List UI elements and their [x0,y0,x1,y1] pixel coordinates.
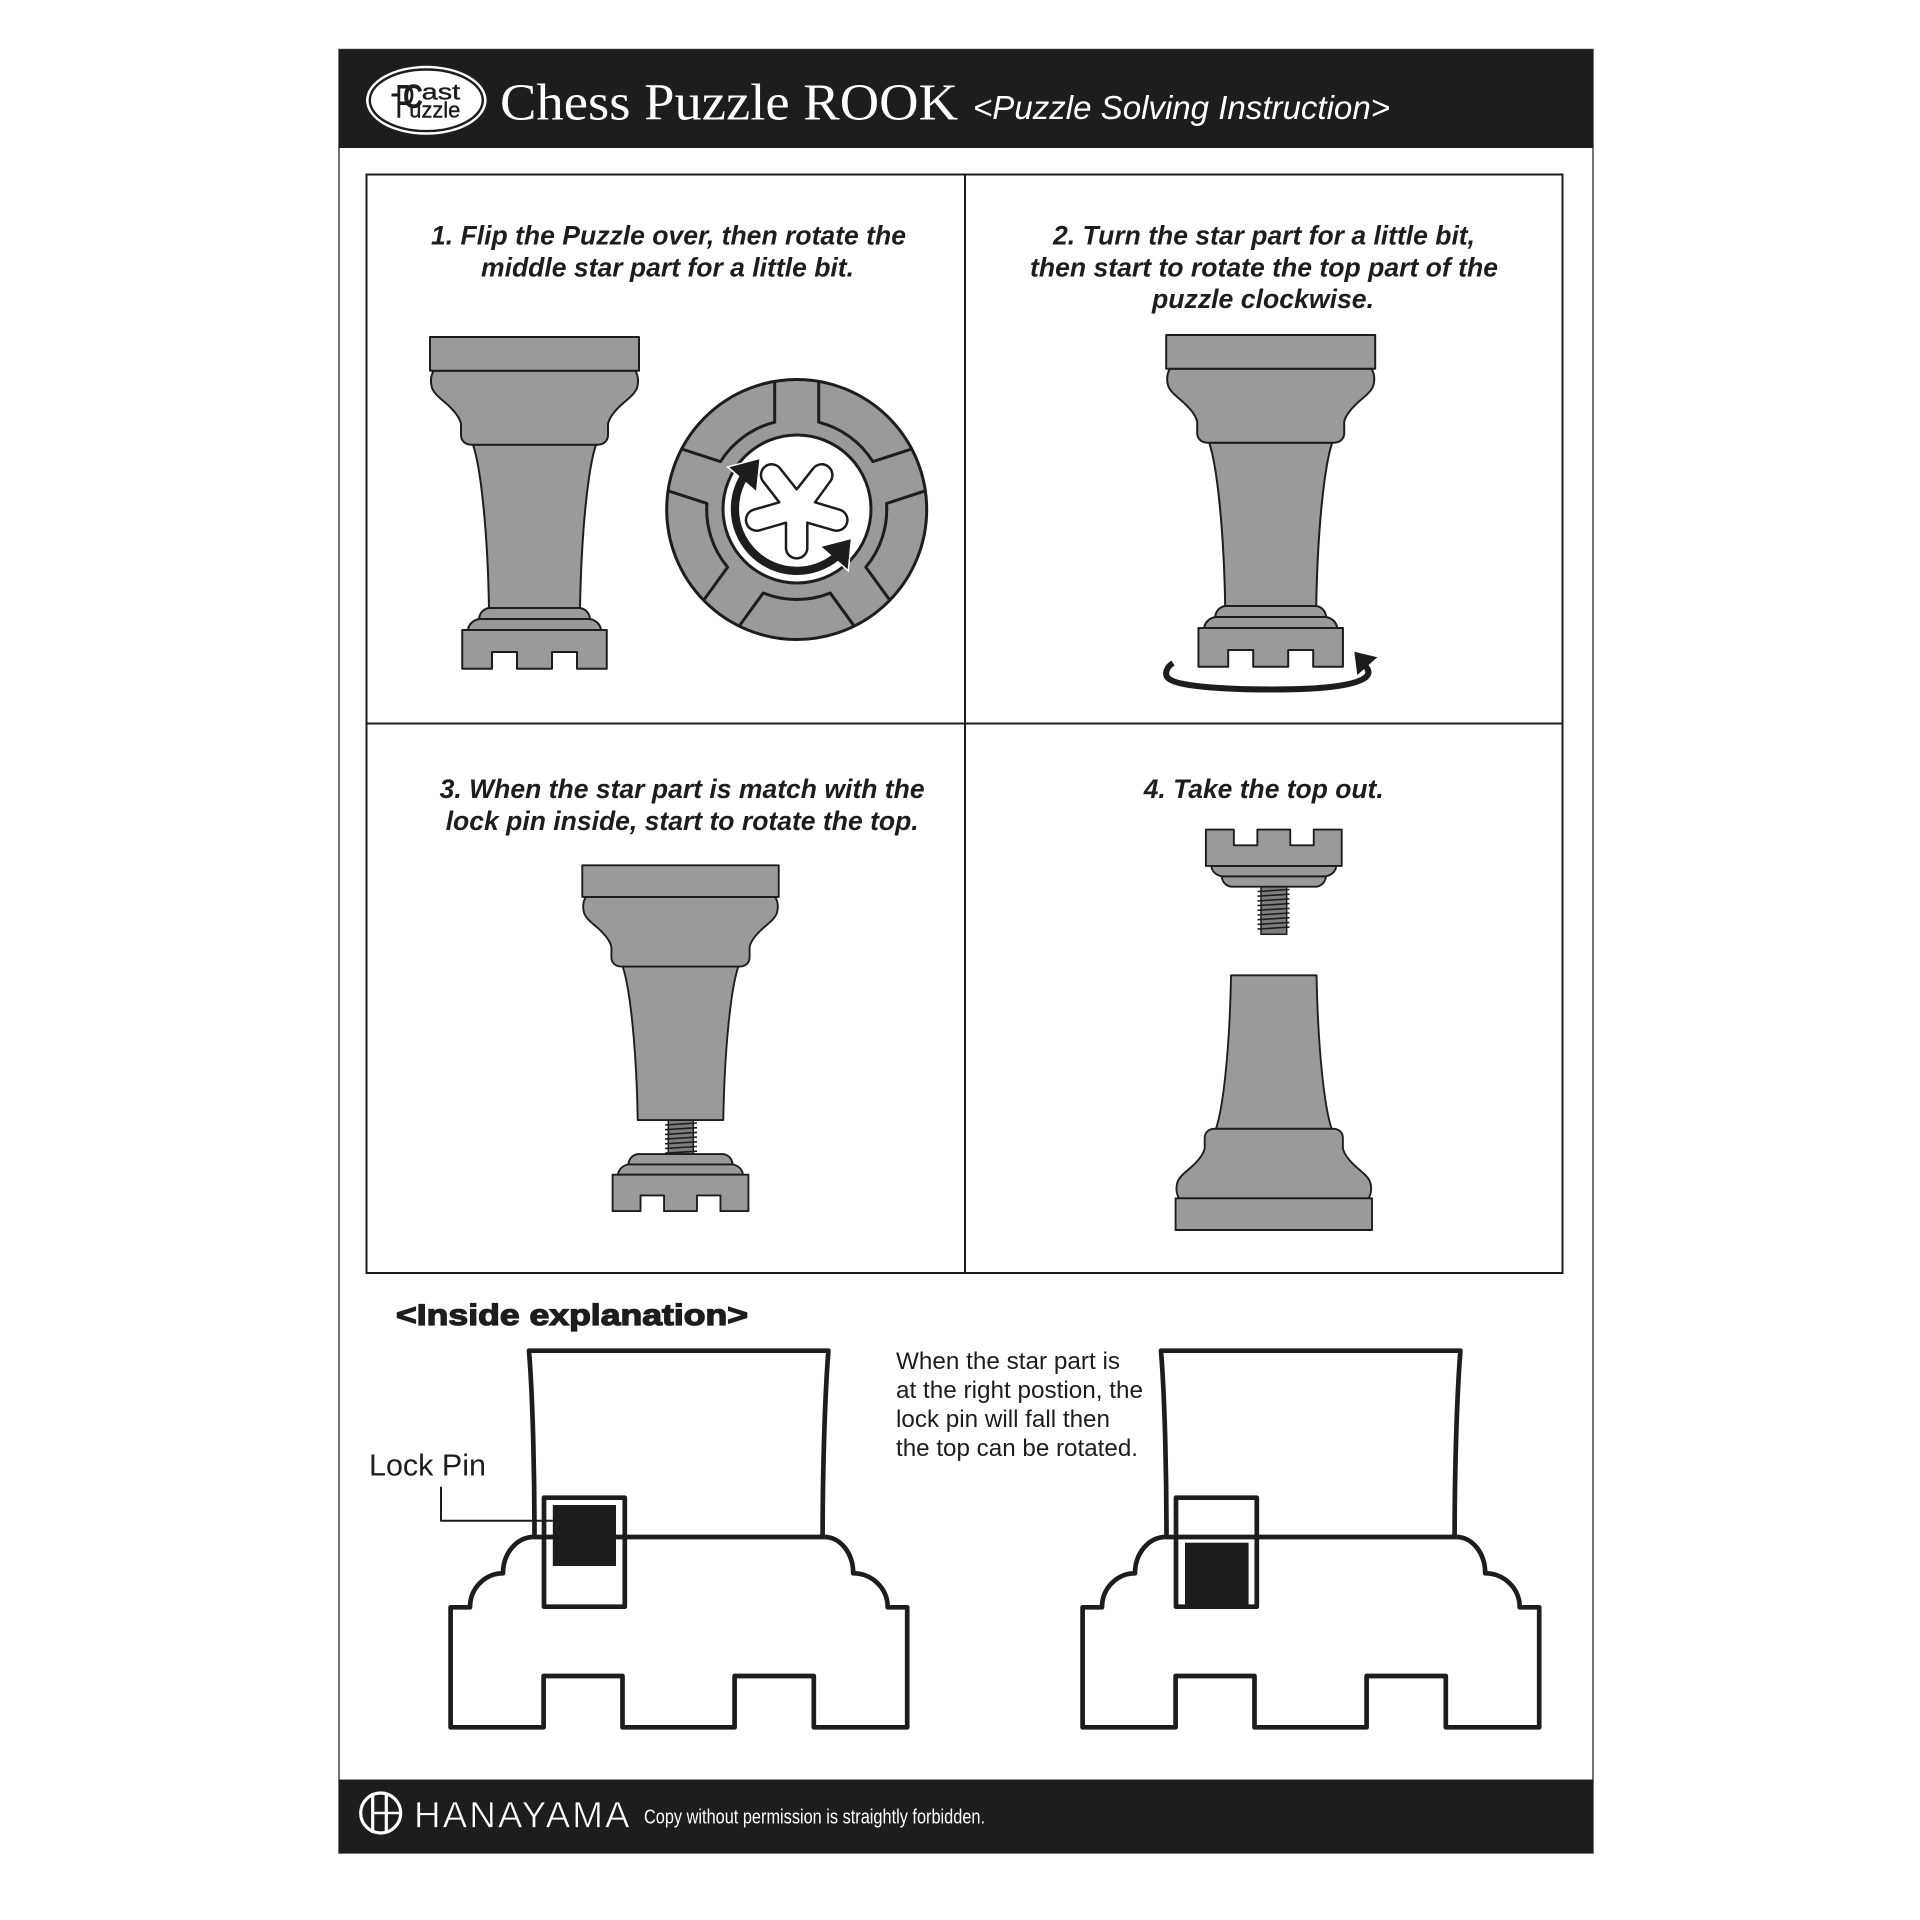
logo: Cast Puzzle: C [403,78,423,116]
step 3 instruction [440,774,925,836]
rook, assembled [430,337,639,669]
lock pin [553,1505,616,1566]
step 3 instruction: lock pin inside, start to rotate the top. [446,806,919,836]
diagram: lock pin fallen [1083,1351,1539,1727]
arrow: rotate star part [729,459,851,571]
panel: step 3 [440,774,925,1211]
arrow: clockwise [1166,652,1377,690]
subtitle: <Puzzle Solving Instruction> [973,89,1390,126]
leader line [441,1487,553,1521]
diagram: lock pin locked [441,1351,907,1727]
panel: step 1 [430,220,954,681]
rook, assembled [1166,335,1375,667]
steps grid [366,174,1562,1273]
step 1 instruction: 1. Flip the Puzzle over, then rotate the [431,220,906,250]
label: lock pin: Lock Pin [369,1449,486,1483]
step 2 instruction: then start to rotate the top part of the [1030,252,1498,282]
explanation text: the top can be rotated. [896,1435,1138,1462]
removed top with screw [1206,830,1342,934]
explanation text: lock pin will fall then [896,1406,1110,1433]
step 2 instruction [1030,220,1498,314]
step 1 instruction [431,220,906,282]
heading: inside explanation: <Inside explanation> [396,1299,748,1332]
header band [339,50,1593,148]
logo: Cast Puzzle: ast [422,79,460,104]
step 3 instruction: 3. When the star part is match with the [440,774,925,804]
copyright notice: Copy without permission is straightly forbidden. [644,1806,985,1828]
step 2 instruction: puzzle clockwise. [1151,284,1374,314]
logo: Cast Puzzle: uzzle [409,97,460,122]
page frame [339,50,1593,1853]
logo: Cast Puzzle: P [395,74,415,127]
step 4 instruction: 4. Take the top out. [1143,774,1384,804]
star [746,464,847,558]
panel: step 4 [1143,774,1384,1230]
panel: step 2 [1030,220,1498,690]
footer band [339,1780,1593,1853]
screw [665,1120,697,1154]
explanation text: at the right postion, the [896,1377,1143,1404]
star hole view [628,361,954,681]
brand name: HANAYAMA [414,1794,630,1836]
rook body [1176,975,1372,1230]
explanation text [896,1348,1143,1462]
lock pin, fallen [1185,1543,1249,1607]
rook top part, base [613,1154,748,1211]
logo: Cast Puzzle [366,66,487,135]
step 2 instruction: 2. Turn the star part for a little bit, [1052,220,1475,250]
rook upper part, raised [582,865,779,1120]
explanation text: When the star part is [896,1348,1120,1375]
step 1 instruction: middle star part for a little bit. [481,252,854,282]
title: Chess Puzzle ROOK [500,74,958,132]
logo: Hanayama mark [361,1793,401,1833]
